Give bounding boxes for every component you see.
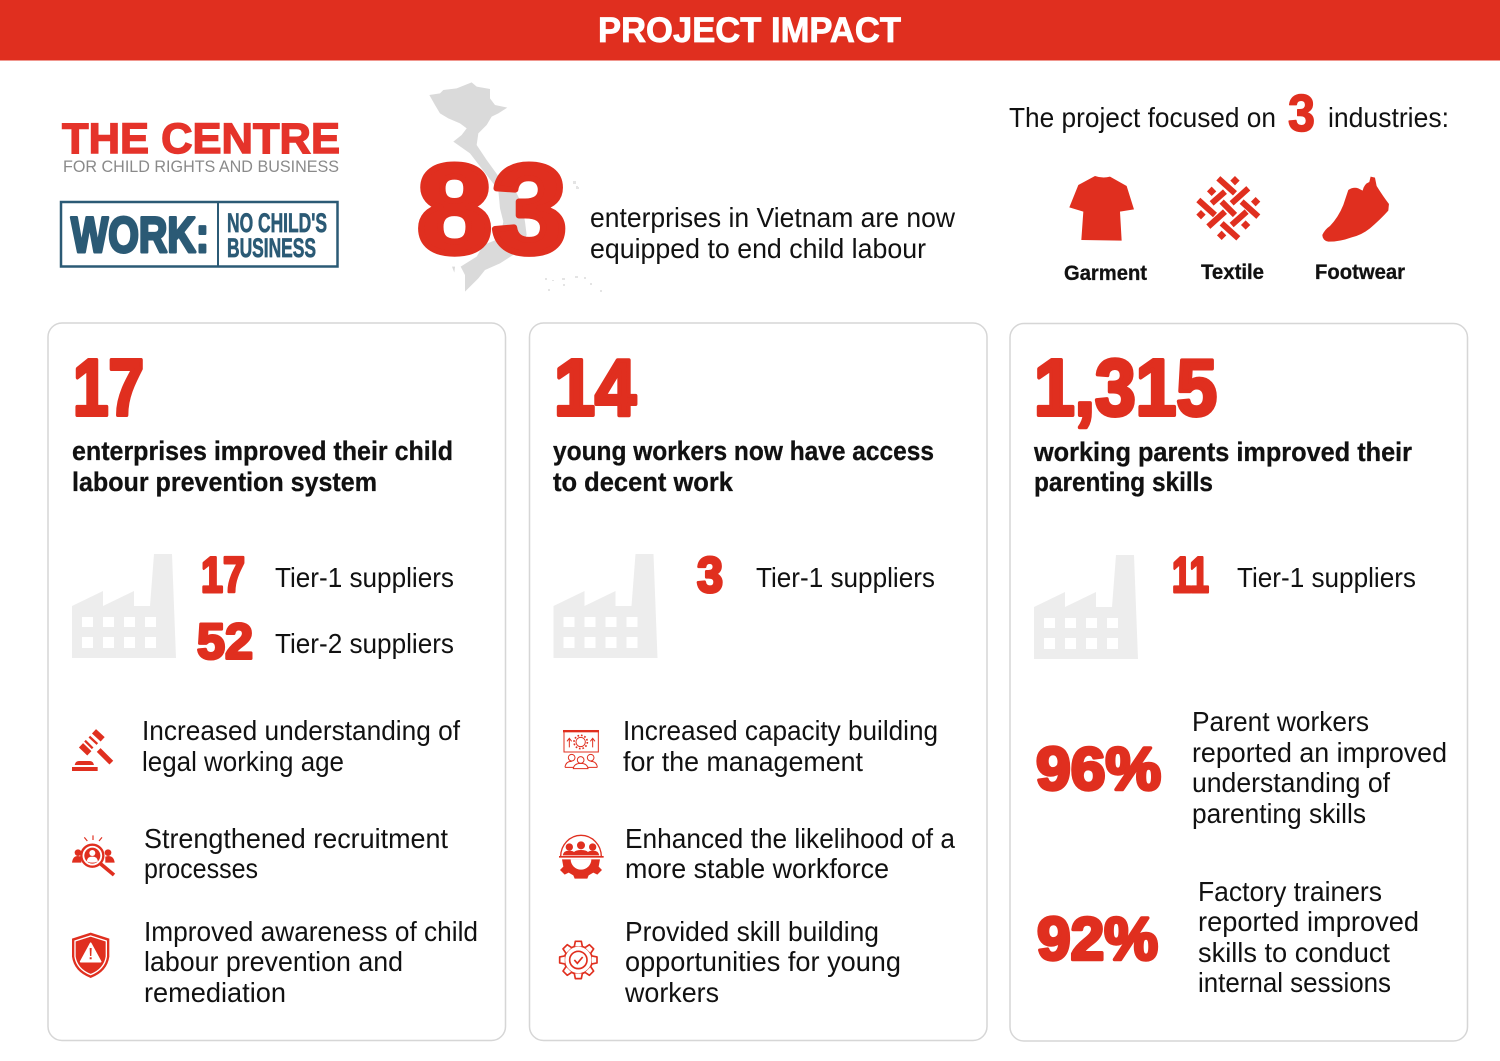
logo: The Centre for Child Rights and Business: THE CENTRE [62, 115, 340, 163]
big number 83 with caption [417, 138, 955, 280]
industries heading: industries: [1328, 102, 1449, 133]
stat: 92%: 92% [1037, 906, 1158, 972]
icon: factory [554, 554, 658, 658]
stat: 17 enterprises: 17 [73, 343, 144, 432]
icon: garment t-shirt [1069, 176, 1134, 241]
stat: 92%: skills to conduct [1198, 937, 1390, 968]
supplier count [697, 547, 935, 603]
industries heading: 3 [1288, 85, 1315, 143]
supplier count: Tier-1 suppliers [756, 562, 935, 593]
text: awareness: Improved awareness of child [144, 916, 478, 947]
stat: 1,315 working parents: working parents improved their [1033, 437, 1412, 467]
big number 83 with caption: equipped to end child labour [590, 233, 926, 264]
supplier counts: Tier-1 suppliers [275, 562, 454, 593]
text: recruitment [144, 823, 448, 884]
text: skill building: workers [624, 977, 719, 1008]
text: skill building [624, 916, 901, 1008]
stat: 96%: 96% [1036, 736, 1161, 802]
supplier counts: Tier-2 suppliers [275, 628, 454, 659]
icon: factory [72, 554, 176, 658]
supplier counts: 52 [197, 614, 253, 670]
card outline [530, 323, 987, 1040]
supplier count: Tier-1 suppliers [1237, 562, 1416, 593]
logo: Work No Child's Business: BUSINESS [227, 233, 316, 263]
stat: 14 young workers [553, 343, 934, 497]
stat: 1,315 working parents [1033, 343, 1412, 497]
industry labels [1064, 261, 1405, 285]
stat: 92%: internal sessions [1198, 967, 1391, 998]
text: legal working age: Increased understanding of [142, 715, 460, 746]
text: legal working age [142, 715, 460, 777]
panel: enterprises [48, 323, 506, 1040]
card outline [48, 323, 506, 1040]
big number 83 with caption: enterprises in Vietnam are now [590, 202, 955, 233]
stat: 17 enterprises [72, 343, 453, 497]
supplier count: 11 [1172, 547, 1209, 603]
stat: 96% [1036, 706, 1447, 829]
text: capacity building: Increased capacity building [623, 715, 938, 746]
text: awareness: remediation [144, 977, 286, 1008]
text: skill building: opportunities for young [625, 946, 901, 977]
logo: Work No Child's Business: WORK: [71, 207, 209, 263]
industries heading: The project focused on [1009, 102, 1276, 133]
industries heading [1009, 85, 1449, 143]
text: awareness [144, 916, 478, 1008]
text: stable workforce: Enhanced the likelihood of a [625, 823, 956, 854]
map of Vietnam [429, 82, 602, 292]
stat: 14 young workers: to decent work [553, 467, 734, 497]
logo: Work No Child's Business: NO CHILD'S [227, 208, 327, 238]
logo: The Centre for Child Rights and Business: FOR CHILD RIGHTS AND BUSINESS [63, 157, 339, 176]
stat: 96%: parenting skills [1192, 798, 1366, 829]
text: awareness: labour prevention and [144, 946, 403, 977]
stat: 1,315 working parents: parenting skills [1034, 467, 1213, 497]
stat: 92%: Factory trainers [1198, 876, 1382, 907]
text: stable workforce [625, 823, 956, 884]
stat: 17 enterprises: labour prevention system [72, 467, 377, 497]
supplier count [1172, 547, 1416, 603]
stat: 1,315 working parents: 1,315 [1034, 343, 1217, 432]
stat: 96%: Parent workers [1192, 706, 1369, 737]
stat: 17 enterprises: enterprises improved their child [72, 436, 453, 466]
icon: gear with check [560, 941, 597, 979]
icon: gavel [72, 731, 111, 771]
text: skill building: Provided skill building [625, 916, 879, 947]
text: recruitment: Strengthened recruitment [144, 823, 448, 854]
panel: working parents [1010, 324, 1468, 1041]
big number 83 with caption: 83 [417, 138, 567, 280]
panel: young workers [530, 323, 987, 1040]
supplier counts [197, 547, 454, 670]
card outline [1010, 324, 1468, 1041]
text: stable workforce: more stable workforce [625, 853, 889, 884]
header banner: PROJECT IMPACT [598, 11, 901, 50]
header banner [0, 0, 1500, 60]
stat: 14 young workers: 14 [554, 343, 636, 432]
industry labels: Garment [1064, 262, 1147, 285]
stat: 96%: understanding of [1192, 767, 1390, 798]
icon: textile weave [1196, 176, 1260, 240]
stat: 92% [1037, 876, 1419, 998]
icon: warning shield [72, 933, 109, 978]
industry labels: Textile [1201, 261, 1264, 284]
text: capacity building [623, 715, 938, 777]
text: recruitment: processes [144, 853, 258, 884]
stat: 96%: reported an improved [1192, 737, 1447, 768]
icon: recruitment magnifier [72, 835, 115, 875]
stat: 92%: reported improved [1198, 906, 1419, 937]
icon: factory [1034, 555, 1138, 659]
text: capacity building: for the management [623, 746, 863, 777]
stat: 14 young workers: young workers now have access [553, 436, 934, 466]
industry labels: Footwear [1315, 261, 1405, 284]
icon: workforce gear [559, 835, 604, 879]
text: legal working age: legal working age [142, 746, 344, 777]
logo: Work No Child's Business [61, 202, 338, 266]
supplier counts: 17 [201, 547, 245, 603]
supplier count: 3 [697, 547, 723, 603]
icon: management training [563, 730, 599, 769]
icon: footwear shoe [1322, 177, 1389, 242]
